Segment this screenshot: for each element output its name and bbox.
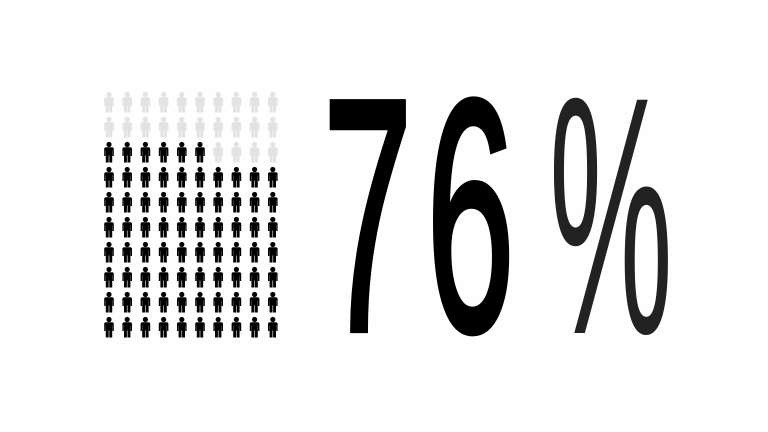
pictogram: 76 black people bbox=[104, 142, 278, 338]
big number: 76%: 6 bbox=[426, 32, 515, 400]
pictogram: 24 grey people bbox=[104, 92, 278, 162]
big number: 76%: % bbox=[549, 26, 673, 405]
big number: 76%: 7 bbox=[323, 31, 412, 401]
big number: 76% bbox=[323, 26, 673, 405]
